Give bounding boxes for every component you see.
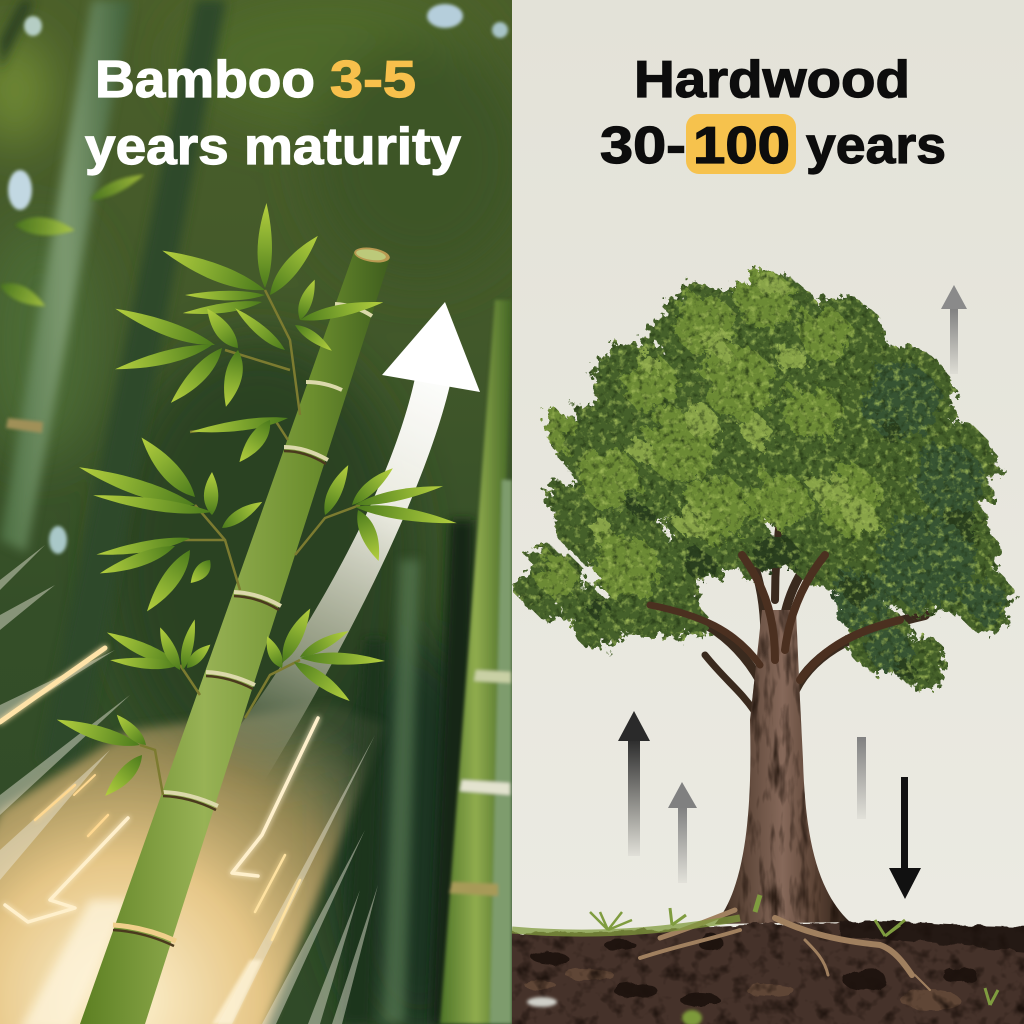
panel: bamboo — [0, 0, 530, 1024]
speed glow and rays — [0, 545, 385, 1024]
grass sprouts — [512, 895, 998, 1005]
tree crown — [518, 270, 1015, 691]
arrow: up gray small — [668, 782, 697, 883]
title: bamboo — [85, 51, 461, 176]
arrow: up right gray — [941, 285, 967, 374]
title: bamboo: years maturity — [85, 118, 461, 176]
title: hardwood: Hardwood — [634, 51, 910, 109]
tree roots — [640, 910, 930, 990]
arrow: growth — [232, 302, 480, 768]
bamboo leaves — [54, 203, 458, 801]
background leaves — [0, 169, 147, 312]
arrow: up dark — [618, 711, 650, 856]
title: hardwood: 100 — [693, 117, 790, 175]
arrow: down black — [889, 777, 921, 899]
tree trunk and branches — [702, 526, 930, 924]
arrow: gray bar — [857, 737, 866, 819]
title: hardwood: 30- — [600, 117, 686, 175]
title: bamboo: Bamboo — [95, 51, 315, 109]
soil — [480, 921, 1024, 1024]
panel: hardwood — [512, 58, 1024, 1024]
bamboo twigs — [140, 290, 360, 795]
title: hardwood — [600, 51, 946, 175]
pale pebble and foreground blur — [527, 997, 702, 1024]
title: hardwood: years — [806, 117, 946, 175]
tree lower branches over crown — [650, 555, 900, 680]
bamboo stalk — [80, 245, 391, 1024]
title: bamboo: 3-5 — [330, 51, 416, 109]
tree — [518, 270, 1015, 924]
